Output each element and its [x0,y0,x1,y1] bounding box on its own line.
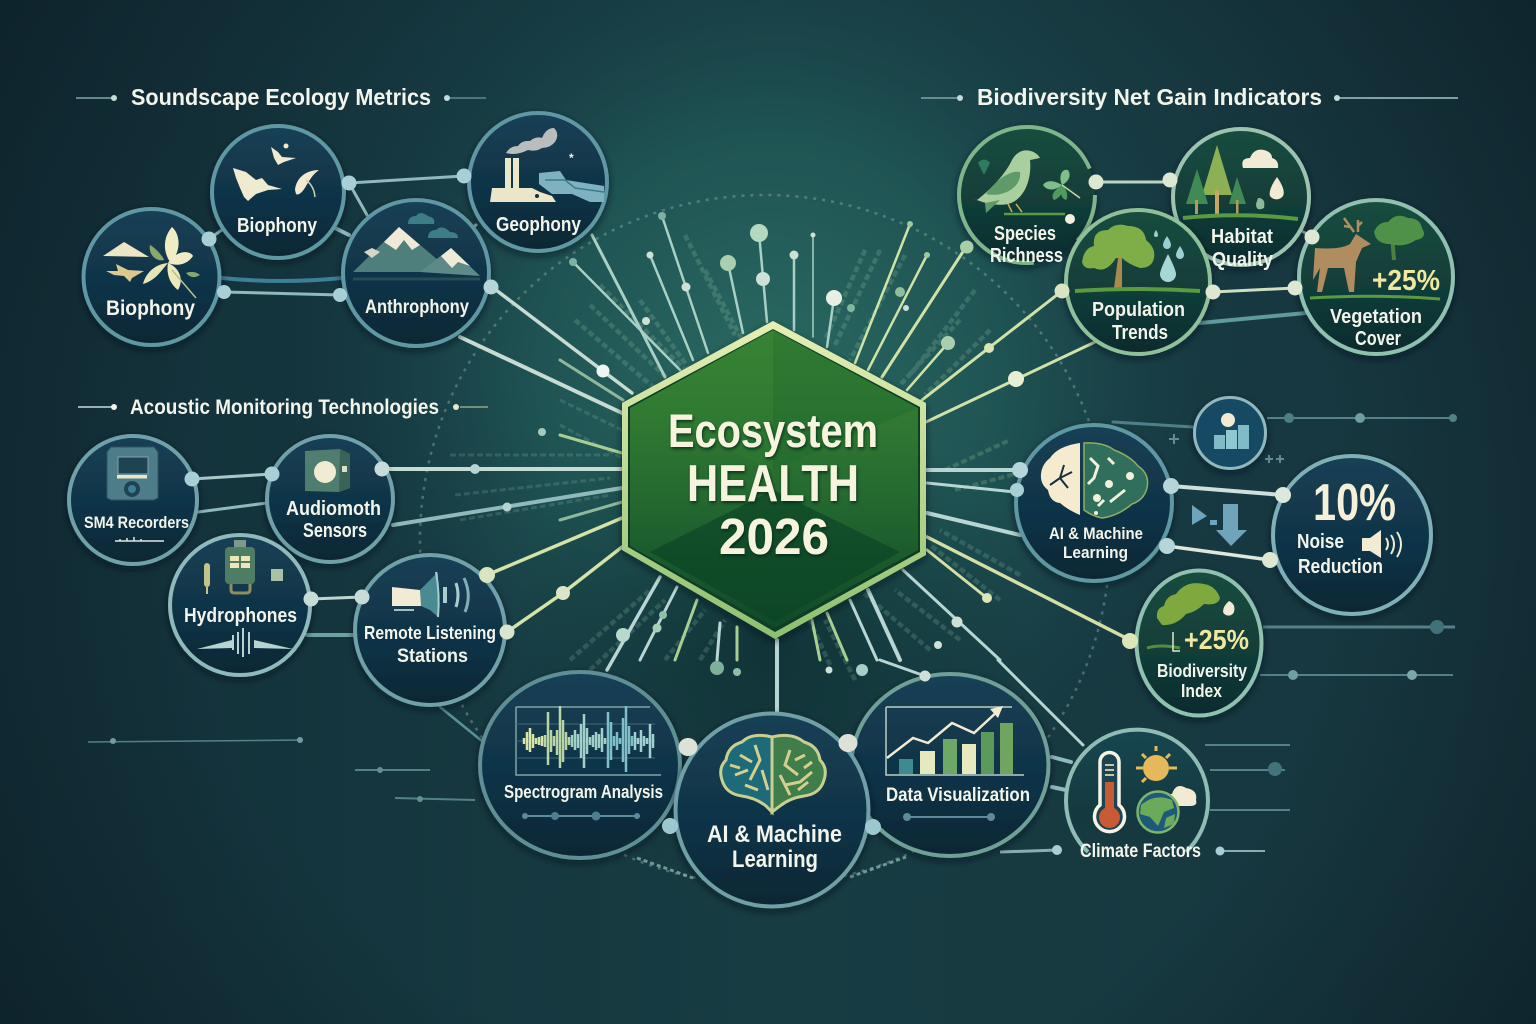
node: habitat quality: Habitat [1211,226,1273,248]
node: anthrophony: Anthrophony [365,297,469,318]
icon: mountains [353,213,480,279]
icon: thermometer sun globe [1095,746,1196,832]
icon: birds [233,144,319,201]
node: sm4 recorders: SM4 Recorders [84,513,189,532]
node: biodiversity index: Biodiversity [1157,661,1247,681]
node: biodiversity index [1122,570,1262,716]
chart: growth bars and trend line [886,706,1024,775]
node: biophony (birds) [212,126,356,258]
node: biophony (plants): Biophony [106,297,195,320]
node: audiomoth sensors: Audiomoth [286,498,381,520]
title text: Ecosystem [668,404,878,457]
node: audiomoth sensors: Sensors [303,520,367,542]
icon: circuit brain [721,735,825,812]
node: climate factors [1052,730,1224,862]
badge: chart icon [1194,398,1266,468]
icon: bird and clover [972,150,1080,214]
node: population trends: Population [1092,299,1185,321]
icon: audiomoth box [305,449,350,492]
icon: speaker [1362,530,1401,558]
node: biophony (plants) [84,209,231,345]
ray nodes [470,212,1024,676]
node: spectrogram analysis [480,672,680,858]
icon: trees cloud and drop [1183,145,1298,219]
node: noise reduction [1262,456,1431,614]
node: audiomoth sensors [264,436,393,562]
node: climate factors: Climate Factors [1080,841,1201,862]
heading: soundscape ecology metrics: Soundscape Ecology Metrics [131,84,431,110]
icon: factory and waves: * [569,151,574,165]
node: species richness: Richness [990,245,1063,267]
node: ai and machine learning (small) [1010,425,1179,581]
connector lines [192,176,1312,790]
node: vegetation cover: Vegetation [1330,306,1422,328]
node: hydrophones: Hydrophones [184,605,297,627]
node: population trends: Trends [1112,322,1168,344]
dotted orbit ring [420,195,1110,885]
central hexagon: ecosystem health 2026 [622,321,926,639]
node: geophony: Geophony [496,214,582,236]
icon: factory and waves [490,128,604,202]
node: remote listening stations: Remote Listening [364,622,496,643]
radiating rays from hexagon [382,216,1130,750]
title text: HEALTH [687,455,859,513]
icon: split brain [1041,443,1148,518]
node: vegetation cover: +25% [1372,265,1440,297]
node: spectrogram analysis: Spectrogram Analysis [504,782,663,802]
heading: biodiversity net gain indicators: Biodiversity Net Gain Indicators [977,84,1322,110]
heading: biodiversity net gain indicators [921,84,1458,110]
node: biodiversity index: +25% [1184,624,1249,655]
node: data visualization [852,674,1048,856]
icon: recorder [107,447,164,541]
node: sm4 recorders [69,436,200,564]
node: ai and machine learning (small): Learning [1063,543,1128,562]
node: habitat quality [1162,129,1309,271]
node: remote listening stations [354,555,514,705]
node: ai and machine learning (large): Learning [732,846,818,873]
node: anthrophony [333,200,498,346]
node: hydrophones [170,535,318,675]
node: population trends [1054,210,1220,354]
node: remote listening stations: Stations [397,646,468,667]
node: geophony [456,113,607,251]
side decorative data lines [88,413,1457,878]
node: biophony (birds): Biophony [237,215,318,237]
node: species richness [959,127,1104,267]
icon: plant and mountain [103,227,200,298]
node: data visualization: Data Visualization [886,785,1030,806]
title text [668,404,878,565]
node: noise reduction: Reduction [1298,556,1383,578]
title text: 2026 [719,508,829,565]
faint data dashes [450,235,1030,680]
node: vegetation cover [1288,200,1453,354]
heading: acoustic monitoring technologies: Acoustic Monitoring Technologies [130,396,439,419]
node: biodiversity index: Index [1181,681,1222,701]
icon: hydrophone device [197,540,293,657]
icon: tree and leaf [1147,583,1234,651]
node: noise reduction: 10% [1313,474,1396,532]
icon: loudspeaker [392,572,468,617]
node: species richness: Species [994,223,1056,245]
node: ai and machine learning (small): AI & Machine [1049,524,1143,543]
icon: deer and tree with +25 percent [1310,216,1440,299]
arrow: reduction arrows [1192,504,1247,546]
icon: tree and rain [1075,225,1200,291]
node: ai and machine learning (large): AI & Machine [707,821,842,848]
node: vegetation cover: Cover [1355,328,1401,350]
chart: waveform [516,706,661,775]
node: habitat quality: Quality [1212,249,1274,271]
node: ai and machine learning (large) [662,670,930,906]
node: noise reduction: Noise [1297,531,1344,553]
